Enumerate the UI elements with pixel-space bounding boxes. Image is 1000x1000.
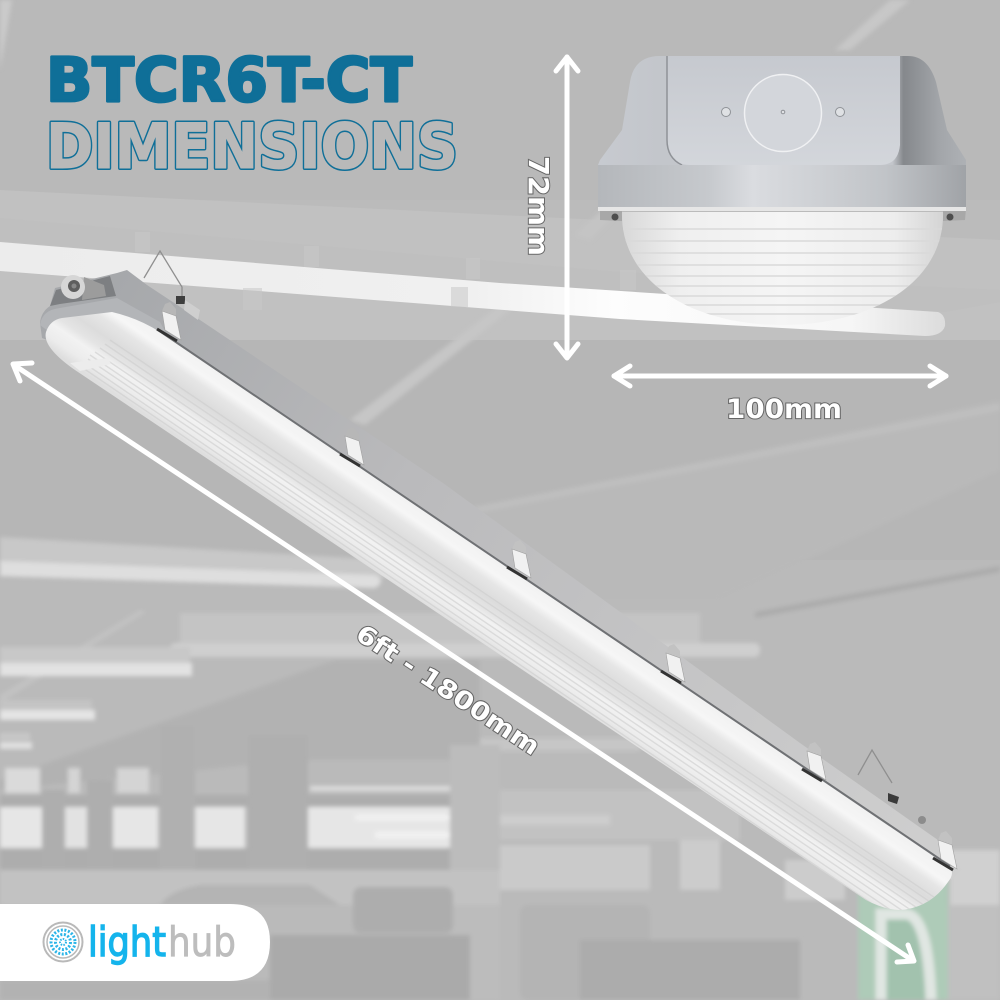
background: ceiling mounted light beam (0, 218, 1000, 336)
end cap highlight (70, 358, 111, 371)
title line: dimensions outline: DIMENSIONS (46, 110, 458, 183)
lower bars (0, 537, 385, 578)
opal ribbed lens (46, 312, 952, 910)
logo icon (44, 922, 82, 962)
arrow: length 1800mm (13, 363, 914, 962)
logo: lighthub (0, 904, 270, 981)
arrow: width 100mm (614, 366, 946, 386)
logo: lighthub: hub (168, 918, 236, 966)
label: 72mm: 72mm (522, 156, 555, 256)
latch clips (157, 302, 957, 870)
dark seam (158, 330, 950, 866)
lens rib lines (80, 340, 950, 933)
arrow: height 72mm (556, 57, 578, 358)
housing (598, 56, 966, 165)
hanger wire left (144, 251, 182, 298)
title (49, 54, 456, 171)
long light fixture (40, 251, 962, 933)
grey housing (40, 270, 962, 880)
dark cavity behind gland (50, 276, 116, 306)
mounting plate left shadow (667, 56, 682, 165)
title line: model: BTCR6T-CT (46, 45, 412, 116)
dark slab and band behind windows (0, 660, 480, 790)
mounting plate (667, 56, 900, 165)
end view of fixture (598, 56, 966, 325)
fluorescent streaks (310, 786, 450, 791)
right lower area (500, 790, 740, 840)
upper windows (5, 768, 40, 793)
side latches (600, 208, 966, 221)
band (598, 165, 966, 207)
green exit sign (858, 880, 948, 1000)
mounting plate knockout (744, 74, 822, 152)
label: 6ft - 1800mm: 6ft - 1800mm (351, 619, 545, 761)
ribbed dome lens (598, 207, 966, 325)
logo pill (0, 904, 270, 981)
lower windows (0, 807, 42, 848)
frame rim (40, 298, 170, 340)
logo wordmark: light (88, 918, 166, 966)
screws (722, 108, 844, 116)
cars (160, 885, 340, 905)
columns (42, 790, 65, 870)
cable gland (61, 275, 106, 300)
mounting hardware (176, 296, 926, 824)
hanger wire right (858, 750, 892, 783)
label: 100mm: 100mm (726, 394, 842, 425)
